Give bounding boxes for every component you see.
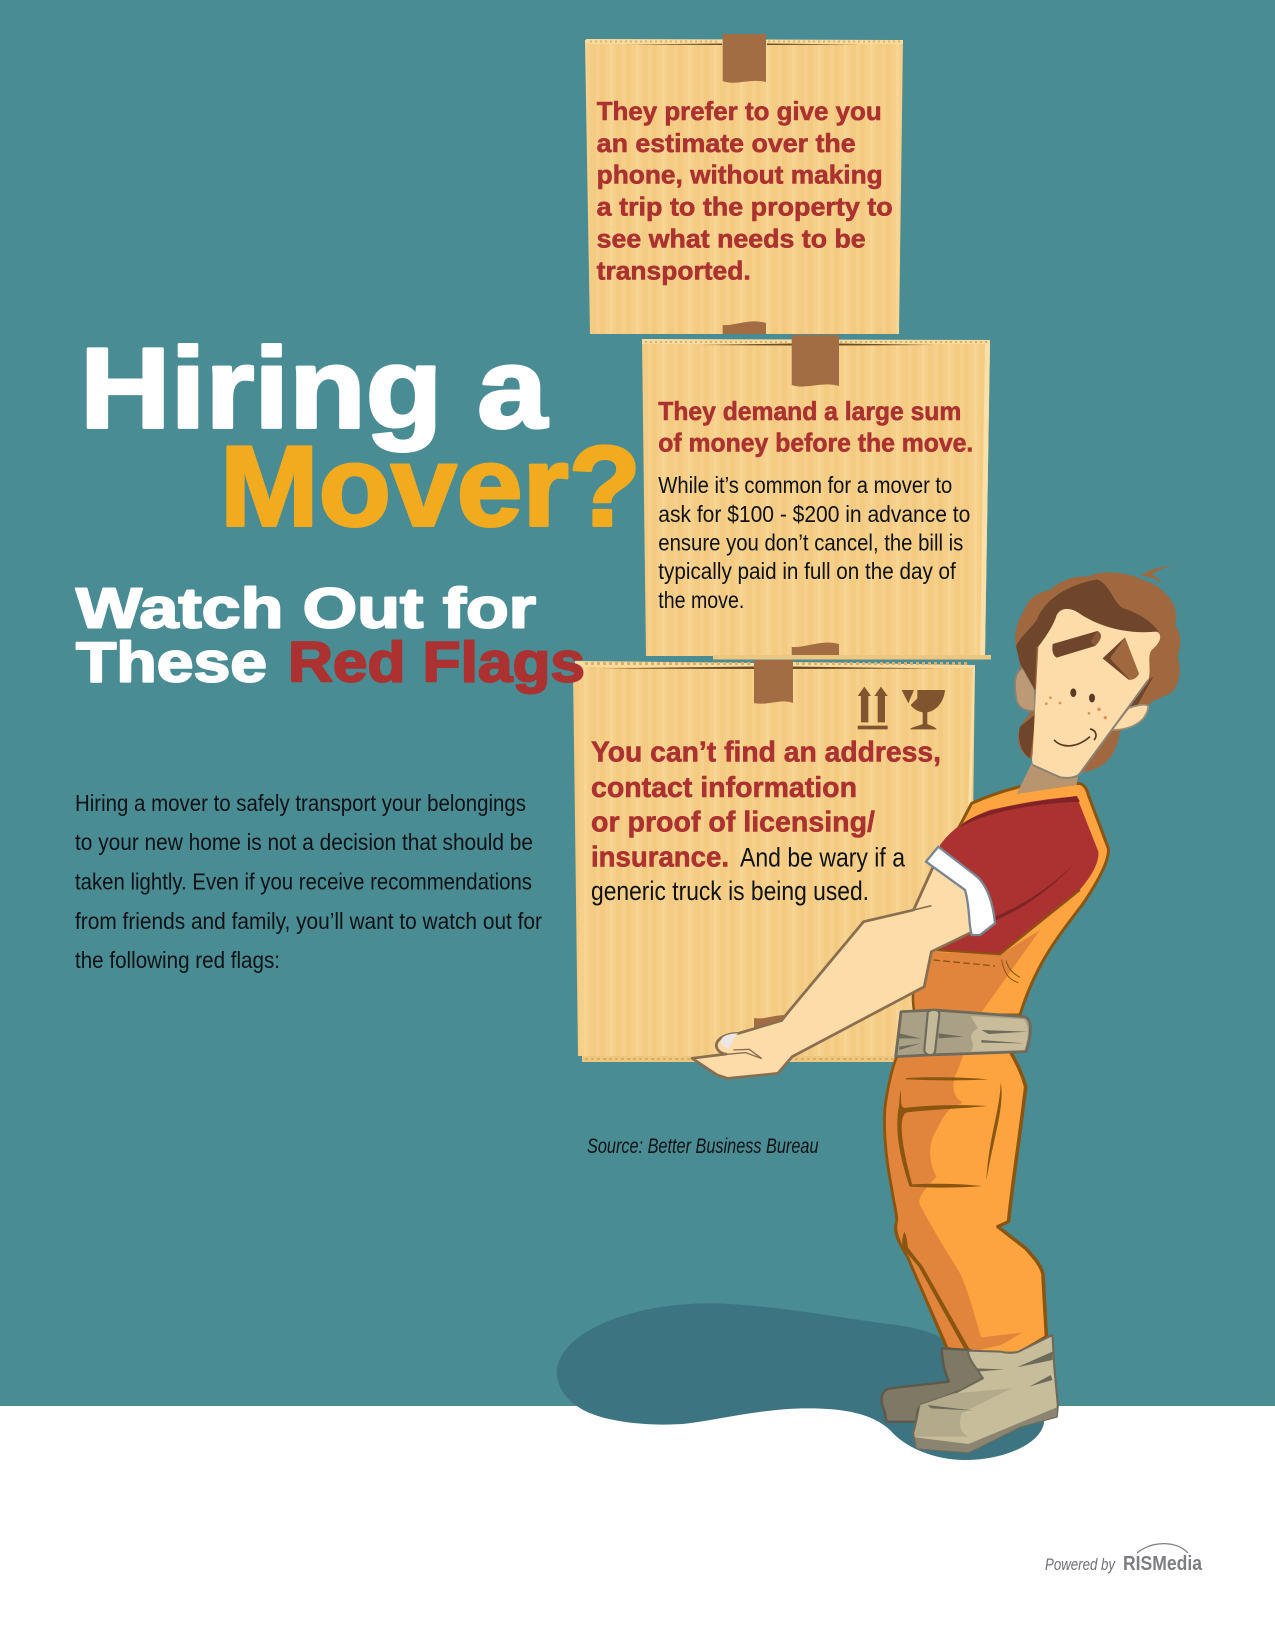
text block: box 2 red flag bbox=[658, 396, 973, 458]
front boot bbox=[913, 1335, 1058, 1452]
gloves tucked in belt bbox=[896, 1010, 1030, 1057]
icon: tape top bbox=[754, 660, 793, 704]
text block: box 3 red flag: contact information bbox=[591, 772, 857, 804]
logo: Powered by RISMedia: RISMedia bbox=[1123, 1553, 1203, 1575]
text block: box 3 red flag: And be wary if a bbox=[740, 842, 906, 872]
text block: box 3 red flag bbox=[591, 736, 941, 906]
hair back bbox=[1015, 572, 1180, 772]
title: Hiring a: Hiring a bbox=[80, 326, 549, 452]
overalls bib bbox=[913, 783, 1108, 1015]
text block: box 2 detail: While it’s common for a mover to bbox=[658, 472, 952, 498]
text block: box 2 detail: ensure you don’t cancel, the bill is bbox=[658, 530, 963, 556]
text block: box 3 red flag: insurance. bbox=[591, 842, 729, 874]
text block: box 1 red flag: phone, without making bbox=[597, 160, 883, 190]
eyebrow left bbox=[1052, 631, 1101, 658]
face bbox=[1032, 609, 1160, 778]
logo: Powered by RISMedia: Powered by bbox=[1045, 1555, 1116, 1574]
red shirt bbox=[933, 796, 1098, 954]
figure shadow bbox=[557, 1303, 1044, 1460]
icon: this way up arrows bbox=[858, 687, 888, 729]
text block: box 2 detail: ask for $100 - $200 in advance to bbox=[658, 501, 970, 527]
text block: box 2 detail: the move. bbox=[658, 587, 744, 613]
icon: tape bottom bbox=[723, 321, 766, 334]
text block: introduction: the following red flags: bbox=[75, 947, 280, 973]
panel: box 3 bbox=[573, 660, 975, 1062]
text block: box 3 red flag: generic truck is being used. bbox=[591, 876, 869, 906]
icon: tape top bbox=[723, 34, 766, 83]
dark hair bbox=[1016, 579, 1158, 690]
freckles bbox=[1045, 696, 1107, 719]
text block: introduction: from friends and family, you’ll want to watch out for bbox=[75, 908, 542, 934]
arm and hand bbox=[692, 867, 989, 1078]
fingernail bbox=[721, 1033, 737, 1049]
text: source: Source: Better Business Bureau bbox=[587, 1135, 819, 1158]
icon: tape bottom bbox=[792, 642, 839, 656]
ear right bbox=[1112, 705, 1148, 730]
text block: introduction: taken lightly. Even if you receive recommendations bbox=[75, 868, 532, 894]
panel: box 1 bbox=[585, 34, 903, 334]
text block: box 2 red flag: of money before the move. bbox=[658, 428, 973, 458]
subtitle: Watch Out for: Watch Out for bbox=[76, 576, 536, 640]
eyebrow right bbox=[1103, 637, 1139, 680]
text block: box 3 red flag: You can’t find an address, bbox=[591, 736, 941, 768]
back boot bbox=[882, 1348, 985, 1422]
icon: fragile glass bbox=[902, 690, 945, 729]
text block: introduction bbox=[75, 790, 542, 973]
text block: box 2 detail: typically paid in full on the day of bbox=[658, 558, 956, 584]
text block: box 1 red flag: an estimate over the bbox=[597, 128, 856, 158]
text block: box 2 red flag: They demand a large sum bbox=[658, 396, 961, 426]
icon: tape bottom bbox=[754, 1015, 790, 1040]
subtitle: These Red Flags bbox=[76, 630, 585, 694]
text block: introduction: to your new home is not a decision that should be bbox=[75, 829, 533, 855]
ear left bbox=[1015, 668, 1035, 711]
smile bbox=[1054, 729, 1096, 746]
logo: Powered by RISMedia bbox=[1045, 1544, 1203, 1575]
text block: box 2 detail bbox=[658, 472, 970, 613]
eyes bbox=[1070, 688, 1076, 697]
shirt sleeve cuff bbox=[926, 847, 995, 935]
text block: box 3 red flag: or proof of licensing/ bbox=[591, 806, 875, 838]
text block: introduction: Hiring a mover to safely transport your belongings bbox=[75, 790, 526, 816]
neck bbox=[1017, 763, 1078, 794]
text block: box 1 red flag: They prefer to give you bbox=[597, 96, 882, 126]
subtitle: These Red Flags: Red Flags bbox=[288, 630, 585, 694]
illustration: mover carrying boxes bbox=[692, 566, 1180, 1452]
text block: box 1 red flag bbox=[597, 96, 893, 286]
icon: tape top bbox=[792, 335, 839, 387]
legs and pants bbox=[885, 1010, 1046, 1353]
subtitle: These Red Flags: These bbox=[76, 630, 267, 694]
title: Mover?: Mover? bbox=[220, 424, 641, 550]
text block: box 1 red flag: a trip to the property to bbox=[597, 192, 893, 222]
text block: box 1 red flag: see what needs to be bbox=[597, 224, 866, 254]
text block: box 1 red flag: transported. bbox=[597, 256, 751, 286]
head bbox=[1015, 566, 1180, 794]
panel: box 2 bbox=[642, 335, 991, 660]
